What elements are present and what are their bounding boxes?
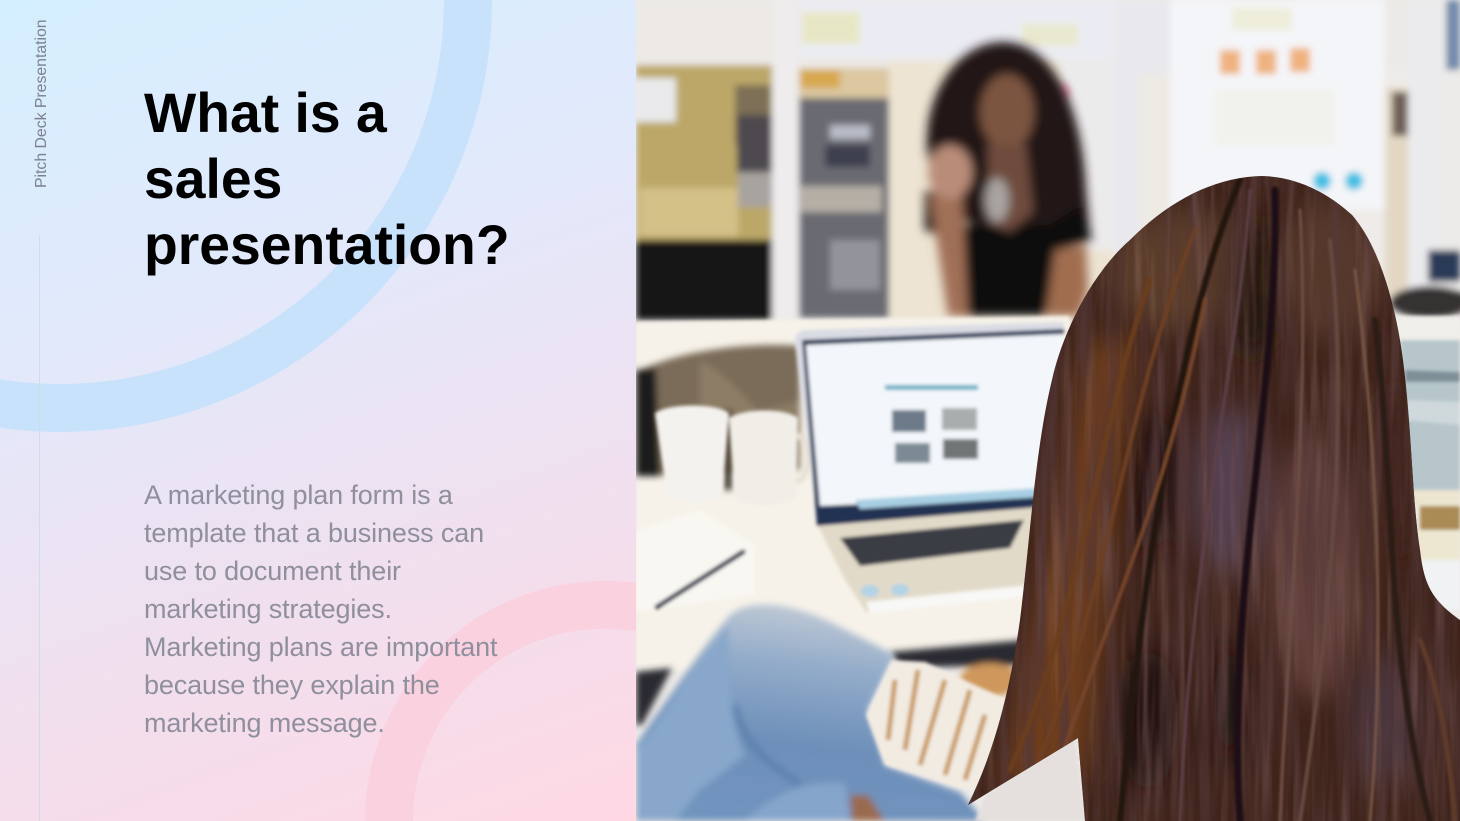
background office (636, 0, 1460, 320)
title: What is a (144, 82, 387, 144)
body text: marketing strategies. (144, 594, 392, 624)
panel: left gradient text panel (0, 0, 636, 821)
body text: use to document their (144, 556, 401, 586)
title (144, 82, 510, 276)
body text: marketing message. (144, 708, 385, 738)
bag on desk (636, 345, 800, 490)
coffee cups (655, 406, 808, 506)
body text: because they explain the (144, 670, 440, 700)
paper and pen (636, 510, 755, 612)
desk and laptop surroundings (636, 316, 1460, 672)
side label: Pitch Deck Presentation (33, 19, 50, 188)
title: presentation? (144, 214, 510, 276)
foreground woman hair (960, 170, 1460, 821)
laptop (795, 322, 1064, 613)
under-desk shadow (636, 640, 1025, 725)
white shirt (975, 735, 1086, 821)
title: sales (144, 148, 282, 210)
body text: template that a business can (144, 518, 484, 548)
torn knee (866, 660, 1012, 790)
jeans (636, 605, 985, 821)
body text: A marketing plan form is a (144, 480, 453, 510)
photo: office meeting scene (636, 0, 1460, 821)
body text: Marketing plans are important (144, 632, 497, 662)
far woman (925, 42, 1092, 316)
body text (144, 480, 498, 738)
